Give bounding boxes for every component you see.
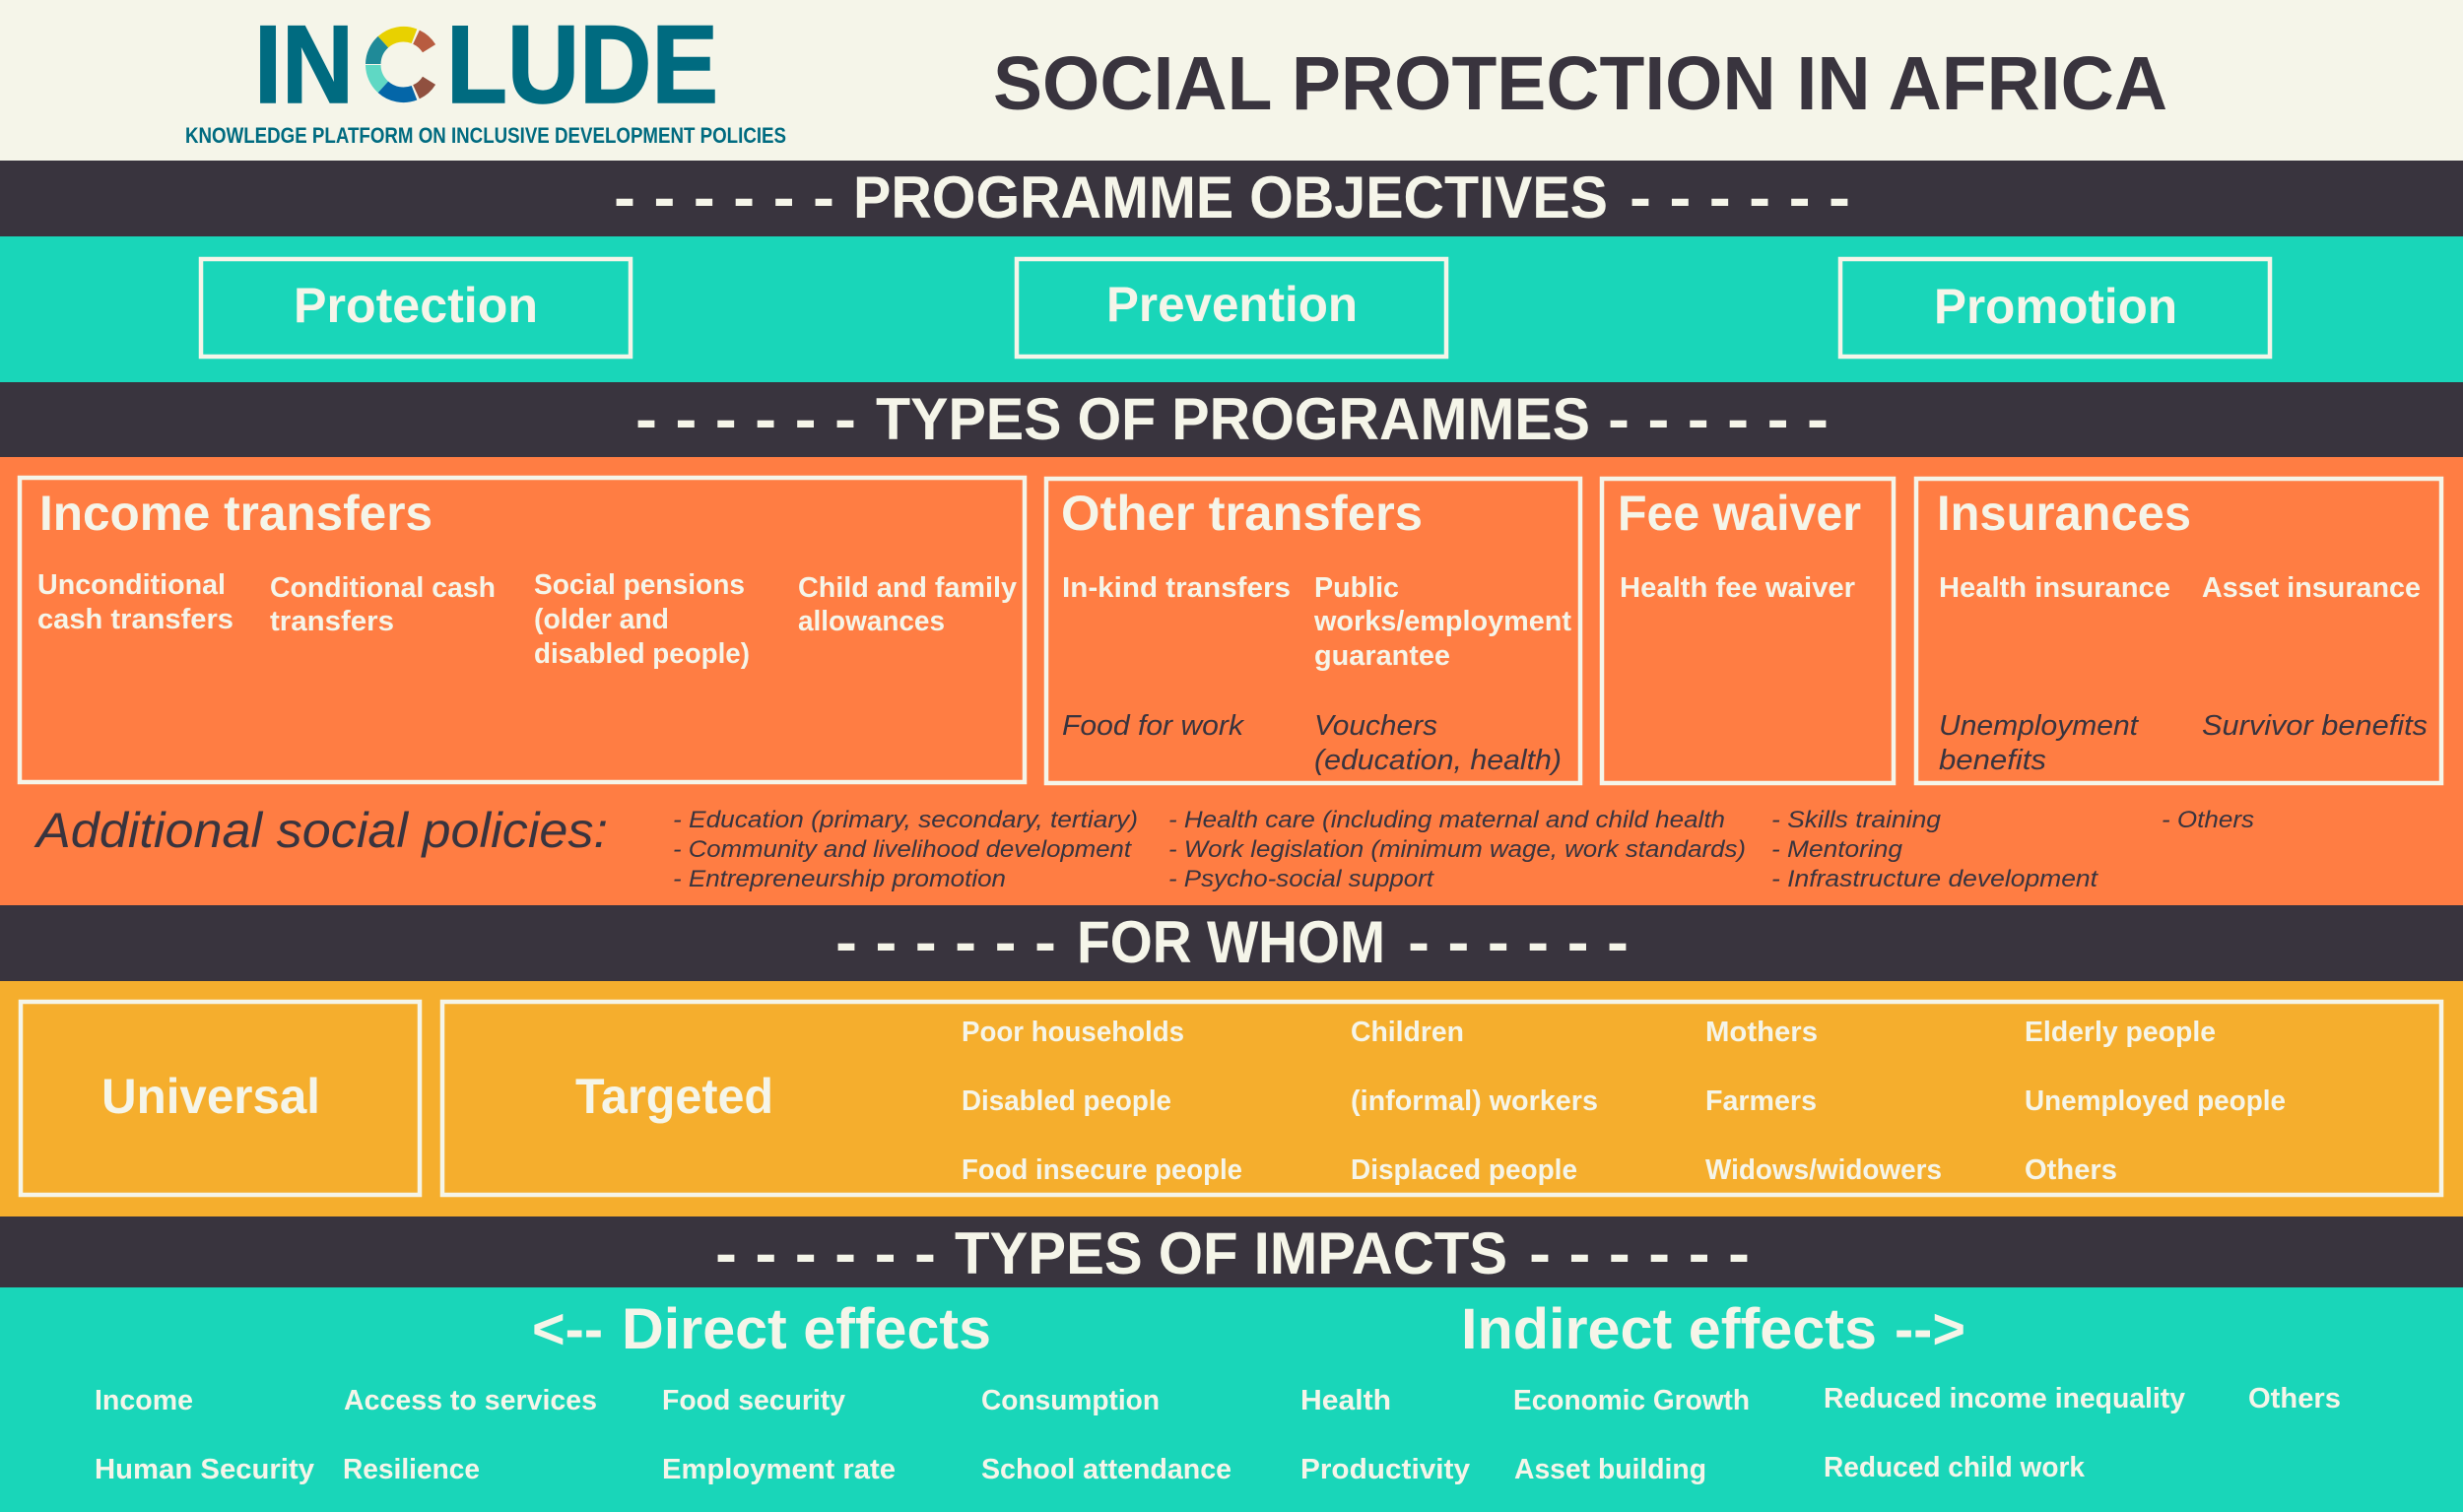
card: other transfers: Food for work [1062, 710, 1245, 742]
additional social policies list: - Community and livelihood development [673, 836, 1132, 863]
column: direct effects: Human Security [95, 1454, 314, 1485]
card: fee waiver: Fee waiver [1618, 486, 1861, 541]
card: income transfers: Unconditional [37, 569, 226, 601]
card: other transfers: Public [1314, 572, 1399, 604]
column: direct effects: Employment rate [662, 1454, 896, 1485]
card: targeted: Mothers [1705, 1017, 1818, 1048]
additional social policies list: - Entrepreneurship promotion [673, 866, 1006, 892]
card: income transfers: cash transfers [37, 604, 233, 635]
column: indirect effects: Productivity [1300, 1454, 1470, 1485]
band: programme objectives heading [0, 161, 2463, 236]
column: direct effects: Direct effects [622, 1297, 991, 1361]
card: targeted: Others [2025, 1154, 2117, 1186]
card: other transfers: Other transfers [1061, 486, 1423, 541]
band: types of impacts heading: - - - - - - [1529, 1220, 1750, 1286]
additional social policies list: - Psycho-social support [1168, 866, 1434, 892]
column: direct effects: School attendance [981, 1454, 1232, 1485]
card: insurances: benefits [1939, 745, 2046, 776]
card: targeted: Targeted [575, 1069, 773, 1124]
band: types of programmes heading: - - - - - - [1608, 386, 1829, 452]
panel: programme objectives [0, 236, 2463, 382]
card: fee waiver [1602, 479, 1894, 783]
card: income transfers [20, 478, 1025, 782]
band: types of impacts heading [0, 1216, 2463, 1287]
additional social policies heading: Additional social policies: [33, 803, 608, 858]
card: insurances [1916, 479, 2441, 783]
card: insurances: Asset insurance [2202, 572, 2421, 604]
card: other transfers: guarantee [1314, 640, 1450, 672]
additional social policies list: - Work legislation (minimum wage, work standards) [1168, 836, 1746, 863]
card: targeted: Elderly people [2025, 1017, 2216, 1048]
objective: protection: Protection [294, 278, 538, 333]
card: insurances: Unemployment [1939, 710, 2140, 742]
card: targeted: Food insecure people [962, 1154, 1242, 1186]
column: direct effects: <-- [532, 1297, 603, 1361]
card: universal [21, 1002, 420, 1195]
card: income transfers: Child and family [798, 572, 1017, 604]
card: income transfers: disabled people) [534, 638, 750, 670]
column: indirect effects: Indirect effects [1461, 1297, 1877, 1361]
card: targeted: Poor households [962, 1017, 1184, 1048]
logo: INCLUDE: IN [254, 3, 354, 126]
band: programme objectives heading: - - - - - - [614, 164, 834, 230]
additional social policies list: - Skills training [1771, 807, 1942, 833]
additional social policies list [673, 807, 2254, 892]
column: direct effects: Food security [662, 1385, 845, 1416]
band: types of programmes heading [0, 382, 2463, 457]
card: other transfers: (education, health) [1314, 745, 1562, 776]
card: income transfers: (older and [534, 604, 669, 635]
card: income transfers: Income transfers [39, 486, 433, 541]
band: types of impacts heading: - - - - - - [715, 1220, 936, 1286]
band: programme objectives heading: - - - - - - [1630, 164, 1850, 230]
additional social policies list: - Others [2162, 807, 2254, 833]
card: other transfers [1046, 479, 1580, 783]
card: other transfers: works/employment [1313, 606, 1571, 637]
column: direct effects: Access to services [344, 1385, 597, 1416]
panel: types of impacts [0, 1287, 2463, 1512]
card: other transfers: Vouchers [1314, 710, 1437, 742]
card: income transfers: allowances [798, 606, 945, 637]
column: indirect effects [1300, 1297, 2341, 1485]
objective: protection [201, 259, 631, 357]
card: targeted [442, 1002, 2441, 1195]
band: for whom heading: - - - - - - [835, 909, 1056, 975]
column: direct effects: Resilience [343, 1454, 480, 1485]
panel: header [0, 0, 2463, 161]
card: universal: Universal [101, 1069, 320, 1124]
card: income transfers: Conditional cash [270, 572, 496, 604]
objective: promotion: Promotion [1934, 279, 2177, 334]
band: for whom heading: FOR WHOM [1077, 909, 1385, 975]
card: income transfers: transfers [270, 606, 394, 637]
band: for whom heading [0, 905, 2463, 981]
card: income transfers: Social pensions [534, 569, 745, 601]
card: targeted: Widows/widowers [1705, 1154, 1942, 1186]
card: fee waiver: Health fee waiver [1620, 572, 1855, 604]
band: for whom heading: - - - - - - [1408, 909, 1629, 975]
column: indirect effects: Reduced child work [1824, 1452, 2086, 1483]
band: types of programmes heading: TYPES OF PROGRAMMES [876, 386, 1590, 452]
column: indirect effects: Asset building [1514, 1454, 1706, 1485]
card: insurances: Insurances [1937, 486, 2191, 541]
card: targeted: (informal) workers [1351, 1085, 1598, 1117]
card: targeted: Displaced people [1351, 1154, 1577, 1186]
additional social policies list: - Mentoring [1771, 836, 1903, 863]
additional social policies list: - Education (primary, secondary, tertiary) [673, 807, 1138, 833]
column: indirect effects: Health [1300, 1385, 1391, 1416]
logo tagline: KNOWLEDGE PLATFORM ON INCLUSIVE DEVELOPMENT POLICIES [185, 123, 786, 148]
objective: promotion [1840, 259, 2270, 357]
logo: INCLUDE: LUDE [446, 3, 718, 126]
card: targeted: Disabled people [962, 1085, 1171, 1117]
column: indirect effects: Others [2248, 1383, 2341, 1414]
additional social policies list: - Infrastructure development [1771, 866, 2098, 892]
title: SOCIAL PROTECTION IN AFRICA [993, 41, 2167, 126]
panel: types of programmes [0, 457, 2463, 905]
card: targeted: Children [1351, 1017, 1464, 1048]
card: other transfers: In-kind transfers [1062, 572, 1291, 604]
column: indirect effects: Reduced income inequality [1824, 1383, 2185, 1414]
panel: for whom [0, 981, 2463, 1216]
card: targeted: Farmers [1705, 1085, 1817, 1117]
band: types of programmes heading: - - - - - - [635, 386, 856, 452]
objective: prevention [1017, 259, 1446, 357]
card: insurances: Health insurance [1939, 572, 2170, 604]
objective: prevention: Prevention [1106, 277, 1358, 332]
column: direct effects: Income [95, 1385, 193, 1416]
additional social policies list: - Health care (including maternal and child health [1168, 807, 1725, 833]
column: indirect effects: Economic Growth [1513, 1385, 1750, 1416]
column: direct effects [95, 1297, 1232, 1485]
card: targeted: Unemployed people [2025, 1085, 2286, 1117]
band: programme objectives heading: PROGRAMME OBJECTIVES [853, 164, 1608, 230]
band: types of impacts heading: TYPES OF IMPACTS [955, 1220, 1507, 1286]
column: indirect effects: --> [1895, 1297, 1965, 1361]
logo: INCLUDE [254, 3, 718, 126]
column: direct effects: Consumption [981, 1385, 1160, 1416]
card: insurances: Survivor benefits [2202, 710, 2428, 742]
